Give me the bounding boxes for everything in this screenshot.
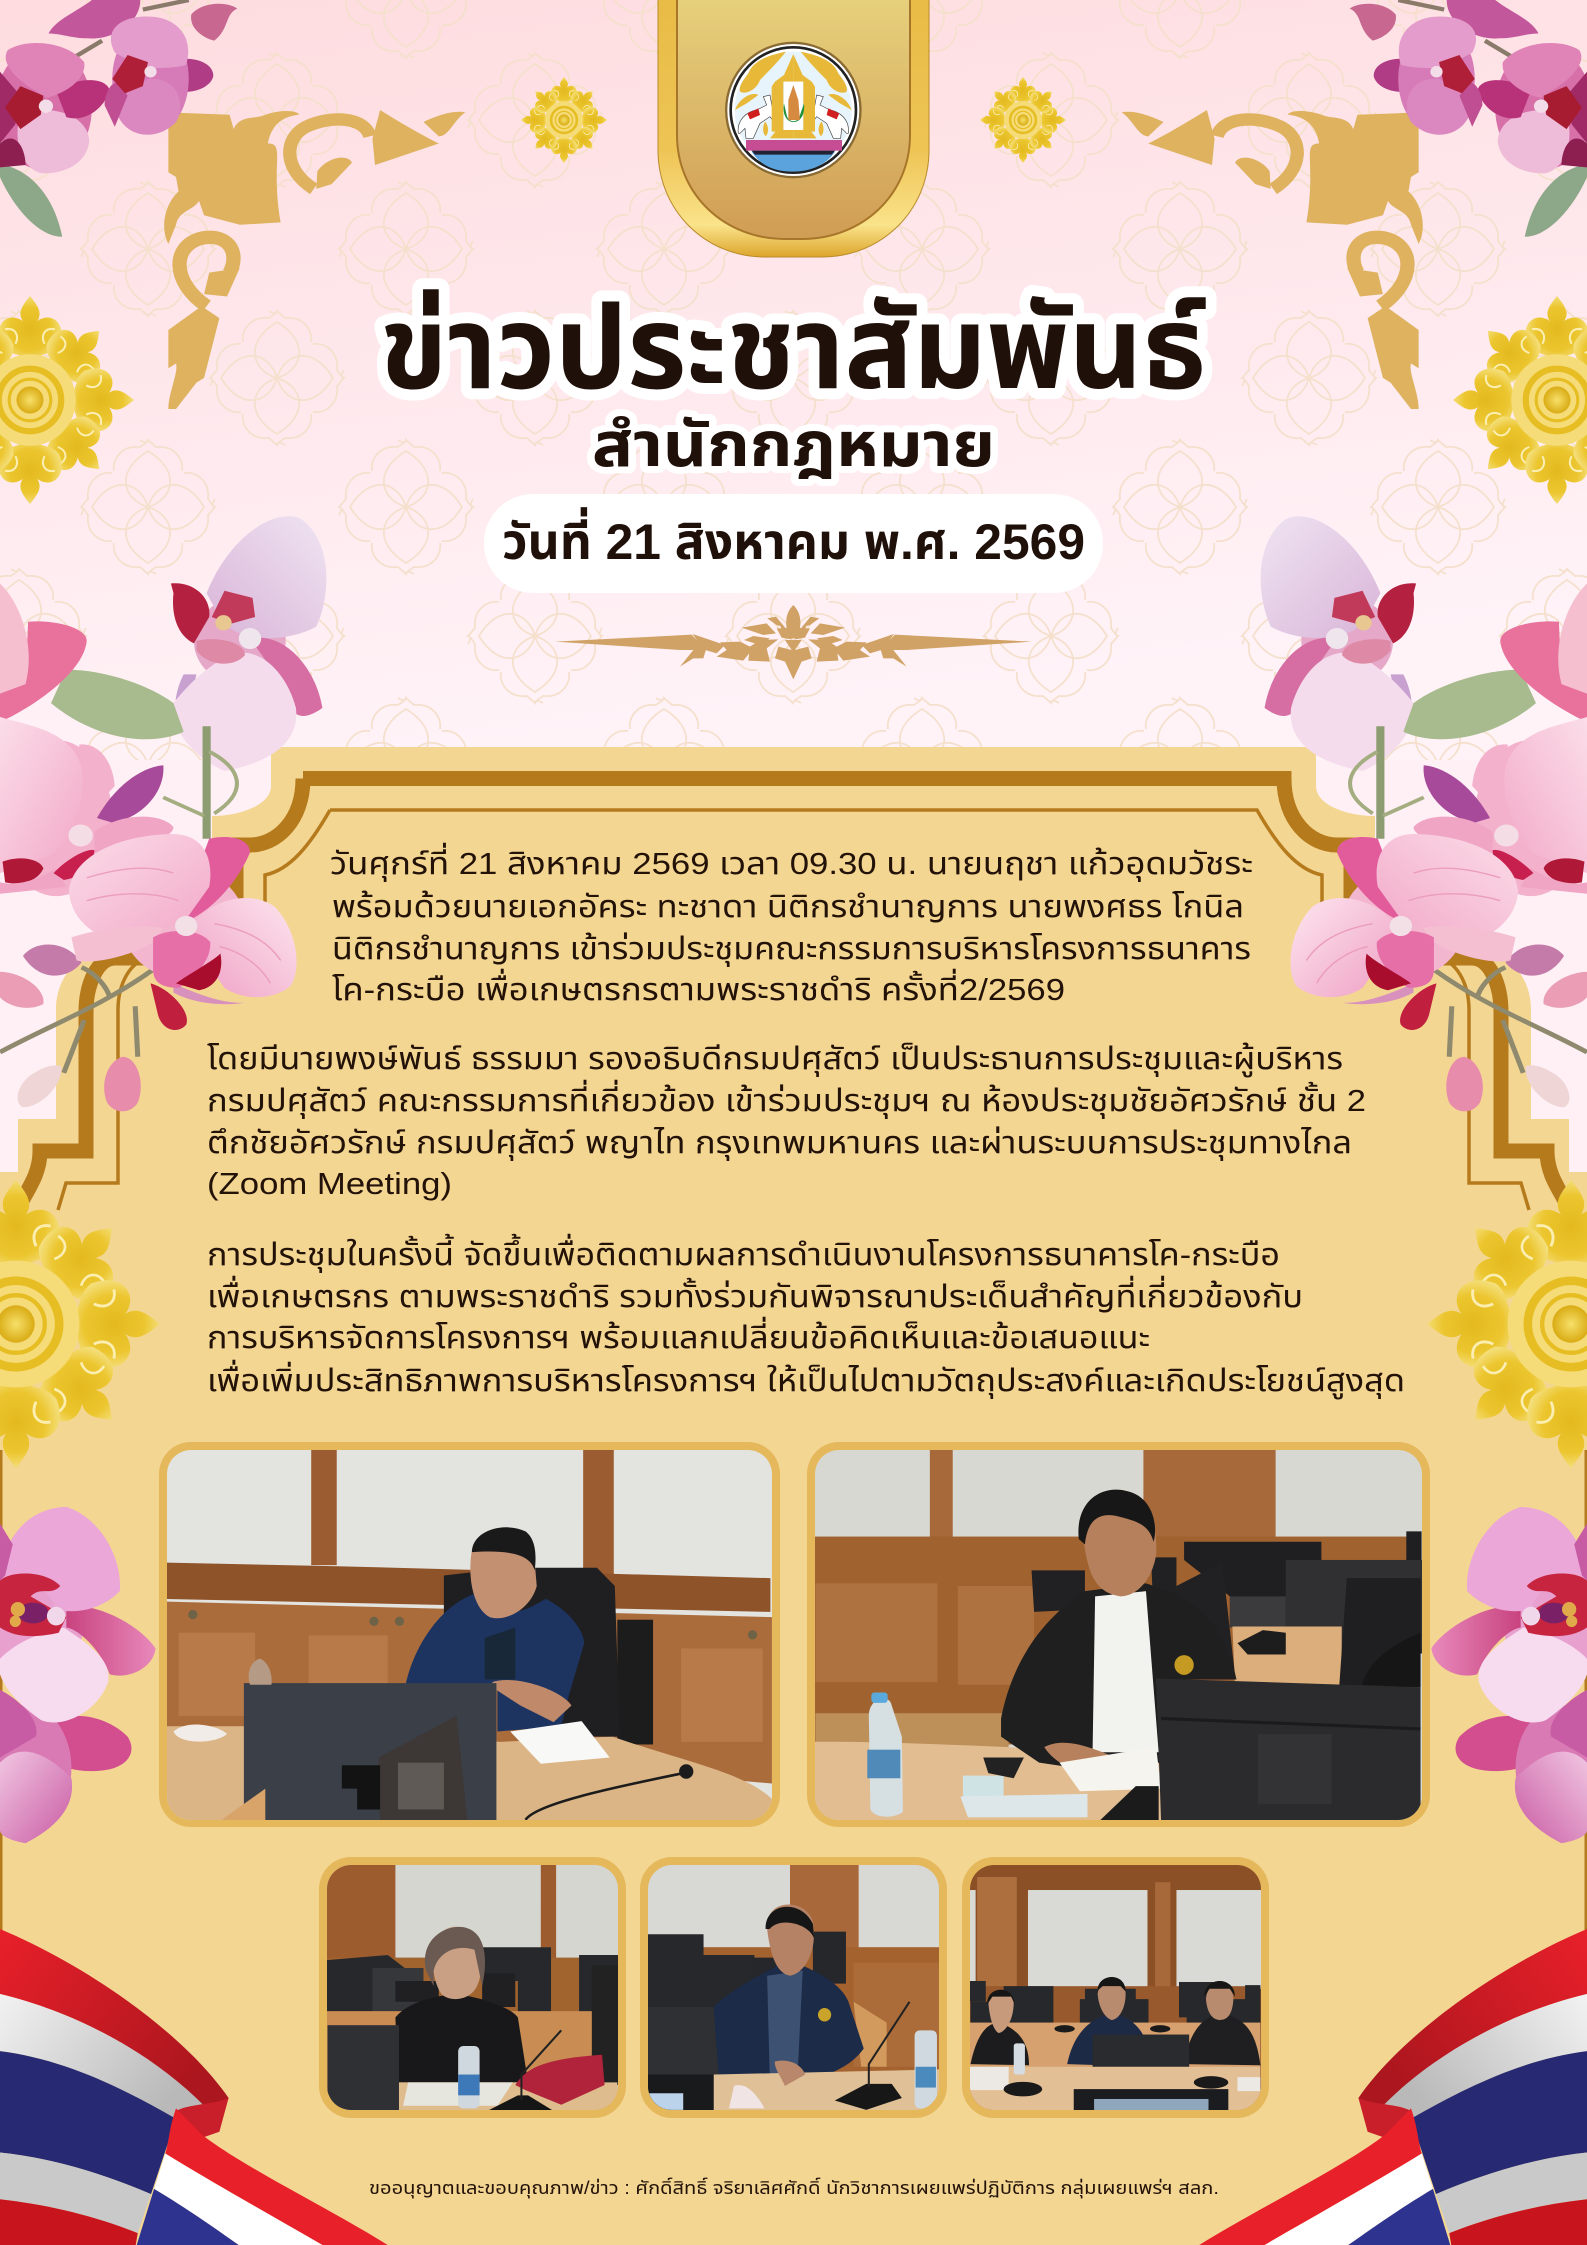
text: paragraph two: โดยมีนายพงษ์พันธ์ ธรรมมา รองอธิบดีกรมปศุสัตว์ เป็นประธานการประชุมและผู้บริหาร	[207, 1041, 1343, 1077]
text: paragraph two	[207, 1041, 1366, 1201]
photo 2: official writing notes	[807, 1442, 1430, 1827]
text: paragraph three: เพื่อเกษตรกร ตามพระราชดำริ รวมทั้งร่วมกันพิจารณาประเด็นสำคัญที่เกี่ยวข้องกับ	[207, 1275, 1303, 1314]
date pill: วันที่ 21 สิงหาคม พ.ศ. 2569	[502, 507, 1085, 570]
text: paragraph two: กรมปศุสัตว์ คณะกรรมการที่เกี่ยวข้อง เข้าร่วมประชุมฯ ณ ห้องประชุมชัยอัศวรักษ์ ชั้น 2	[207, 1079, 1366, 1119]
panel: content background and frames	[0, 747, 1587, 2245]
text: paragraph one	[330, 842, 1253, 1007]
text: paragraph three: การประชุมในครั้งนี้ จัดขึ้นเพื่อติดตามผลการดำเนินงานโครงการธนาคารโค-กระบือ	[207, 1233, 1280, 1273]
subtitle: สำนักกฎหมาย	[592, 411, 995, 480]
date pill	[484, 494, 1103, 593]
text: paragraph one: พร้อมด้วยนายเอกอัคระ ทะชาดา นิติกรชำนาญการ นายพงศธร โกนิล	[332, 889, 1244, 924]
text: paragraph one: โค-กระบือ เพื่อเกษตรกรตามพระราชดำริ ครั้งที่2/2569	[332, 968, 1065, 1007]
ornament divider	[555, 605, 1032, 679]
photo 3: woman in black	[319, 1857, 626, 2118]
text: paragraph two: (Zoom Meeting)	[207, 1166, 452, 1201]
photo 5: group of three staff	[962, 1857, 1269, 2118]
text: paragraph one: วันศุกร์ที่ 21 สิงหาคม 2569 เวลา 09.30 น. นายนฤชา แก้วอุดมวัชระ	[330, 842, 1253, 882]
title: ข่าวประชาสัมพันธ์	[380, 283, 1206, 413]
gold shield badge	[658, 0, 929, 257]
text: paragraph one: นิติกรชำนาญการ เข้าร่วมประชุมคณะกรรมการบริหารโครงการธนาคาร	[332, 931, 1251, 967]
text: paragraph three	[207, 1233, 1405, 1399]
icon: government seal	[725, 42, 862, 178]
text: paragraph two: ตึกชัยอัศวรักษ์ กรมปศุสัตว์ พญาไท กรุงเทพมหานคร และผ่านระบบการประชุมทางไกล	[207, 1125, 1352, 1161]
text: paragraph three: การบริหารจัดการโครงการฯ พร้อมแลกเปลี่ยนข้อคิดเห็นและข้อเสนอแนะ	[207, 1316, 1150, 1355]
footer credit: ขออนุญาตและขอบคุณภาพ/ข่าว : ศักดิ์สิทธิ์ จริยาเลิศศักดิ์ นักวิชาการเผยแพร่ปฏิบัติการ กลุ่มเผยแพร่ฯ สลก.	[369, 2177, 1219, 2199]
photo 1: official at meeting desk	[159, 1442, 780, 1827]
right decorative florals and flag	[980, 0, 1587, 2245]
left decorative florals and flag	[0, 0, 607, 2245]
text: paragraph three: เพื่อเพิ่มประสิทธิภาพการบริหารโครงการฯ ให้เป็นไปตามวัตถุประสงค์และเกิดประโยชน์สูงสุด	[207, 1359, 1405, 1399]
photo 4: man in navy jacket	[640, 1857, 948, 2118]
